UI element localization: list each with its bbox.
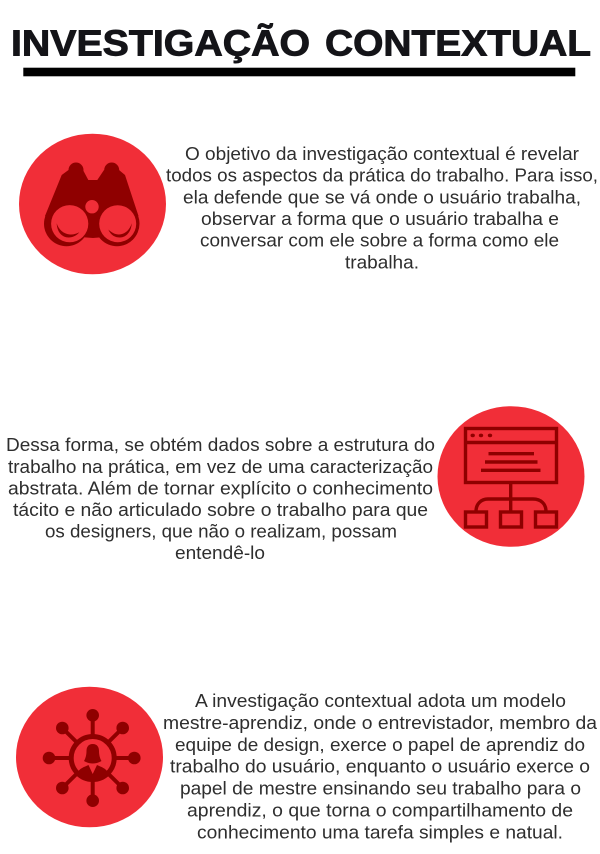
text block: objective: observar a forma que o usuário trabalha e [201,209,559,229]
title underline bar [23,68,575,76]
text block: master-apprentice model: A investigação contextual adota um modelo [195,691,566,711]
text block: master-apprentice model: papel de mestre ensinando seu trabalho para o [180,778,581,798]
text block: master-apprentice model: trabalho do usuário, enquanto o usuário exerce o [170,756,590,776]
text block: objective: todos os aspectos da prática do trabalho. Para isso, [166,166,598,186]
text block: structure of work: tácito e não articulado sobre o trabalho para que [13,500,428,520]
text block: master-apprentice model [163,691,598,842]
text block: objective: trabalha. [345,252,419,272]
text block: structure of work: os designers, que não o realizam, possam [45,522,397,542]
text block: structure of work: entendê-lo [175,543,265,563]
icon: binoculars in red circle [19,134,166,274]
text block: master-apprentice model: mestre-aprendiz, onde o entrevistador, membro da [163,713,598,733]
text block: objective: conversar com ele sobre a forma como ele [200,230,559,250]
title [11,22,591,64]
text block: structure of work: abstrata. Além de tornar explícito o conhecimento [8,478,433,498]
text block: objective: O objetivo da investigação contextual é revelar [185,144,579,164]
text block: master-apprentice model: aprendiz, o que torna o compartilhamento de [187,800,573,820]
text block: structure of work: Dessa forma, se obtém dados sobre a estrutura do [6,435,435,455]
text block: master-apprentice model: equipe de design, exerce o papel de aprendiz do [175,735,585,755]
title: INVESTIGAÇÃO [11,22,310,64]
text block: objective [166,144,598,272]
icon: website hierarchy in red circle [438,406,584,547]
text block: master-apprentice model: conhecimento uma tarefa simples e natual. [197,822,563,842]
text block: structure of work [6,435,435,563]
title: CONTEXTUAL [325,22,591,64]
text block: objective: ela defende que se vá onde o usuário trabalha, [183,188,581,208]
icon: person network in red circle [16,687,163,827]
text block: structure of work: trabalho na prática, em vez de uma caracterização [8,457,433,477]
